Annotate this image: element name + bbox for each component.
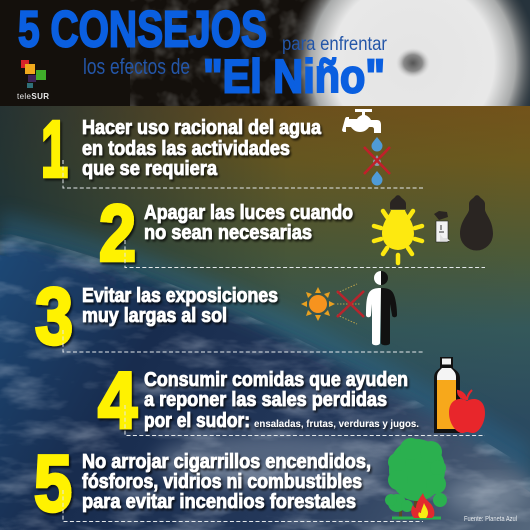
tip 5 text: para evitar incendios forestales (82, 490, 356, 513)
tip 4 (98, 356, 485, 444)
logo: teleSUR (17, 60, 49, 101)
icon: tree with fire (385, 438, 447, 520)
tip 3 number: 3 (35, 272, 73, 360)
tip 2 text: no sean necesarias (144, 221, 312, 244)
icon: light switch (434, 211, 450, 242)
tip 5 number: 5 (34, 438, 72, 528)
tip 1 number: 1 (41, 104, 68, 194)
subtitle: para enfrentar: para enfrentar (282, 34, 388, 55)
tip 2 text: Apagar las luces cuando (144, 201, 353, 224)
icon: person half in shade (366, 271, 397, 345)
title: 5 CONSEJOS: 5 CONSEJOS (18, 0, 267, 58)
subtitle: los efectos de: los efectos de (83, 54, 190, 79)
tip 2 text (144, 201, 353, 244)
icon: sun with red cross (301, 284, 364, 324)
tip 1 text: que se requiera (82, 157, 218, 180)
title: El Niño: "El Niño" (203, 50, 385, 102)
tip 4 text (144, 368, 419, 432)
tip 3 (35, 272, 423, 360)
icon: faucet with crossed-out drops (342, 109, 390, 186)
tip 4 text: Consumir comidas que ayuden (144, 368, 408, 391)
tip 5 text: fósforos, vidrios ni combustibles (82, 470, 362, 493)
tip 3 text (82, 284, 278, 327)
icon: lit bulb (374, 195, 422, 263)
tip 4 text: por el sudor: (144, 409, 250, 432)
tip 2 (99, 188, 485, 278)
header band with hurricane (0, 0, 530, 106)
tip 3 text: muy largas al sol (82, 304, 227, 327)
tip 1 text: Hacer uso racional del agua (82, 116, 322, 139)
tip 5 (34, 438, 423, 528)
background: earth from orbit (0, 106, 530, 530)
tip 2 number: 2 (99, 188, 136, 278)
icon: bottle and apple (434, 357, 485, 433)
icon: dark bulb (460, 195, 493, 251)
tip 1 text: en todas las actividades (82, 137, 290, 160)
tip 1 (41, 104, 423, 194)
tip 4 text: a reponer las sales perdidas (144, 388, 387, 411)
tip 4 text: ensaladas, frutas, verduras y jugos. (254, 418, 419, 430)
tip 5 text (82, 450, 371, 513)
logo: teleSUR: teleSUR (17, 92, 49, 101)
tip 1 text (82, 116, 322, 180)
tip 3 text: Evitar las exposiciones (82, 284, 278, 307)
tip 5 text: No arrojar cigarrillos encendidos, (82, 450, 371, 473)
tip 4 number: 4 (98, 356, 137, 444)
